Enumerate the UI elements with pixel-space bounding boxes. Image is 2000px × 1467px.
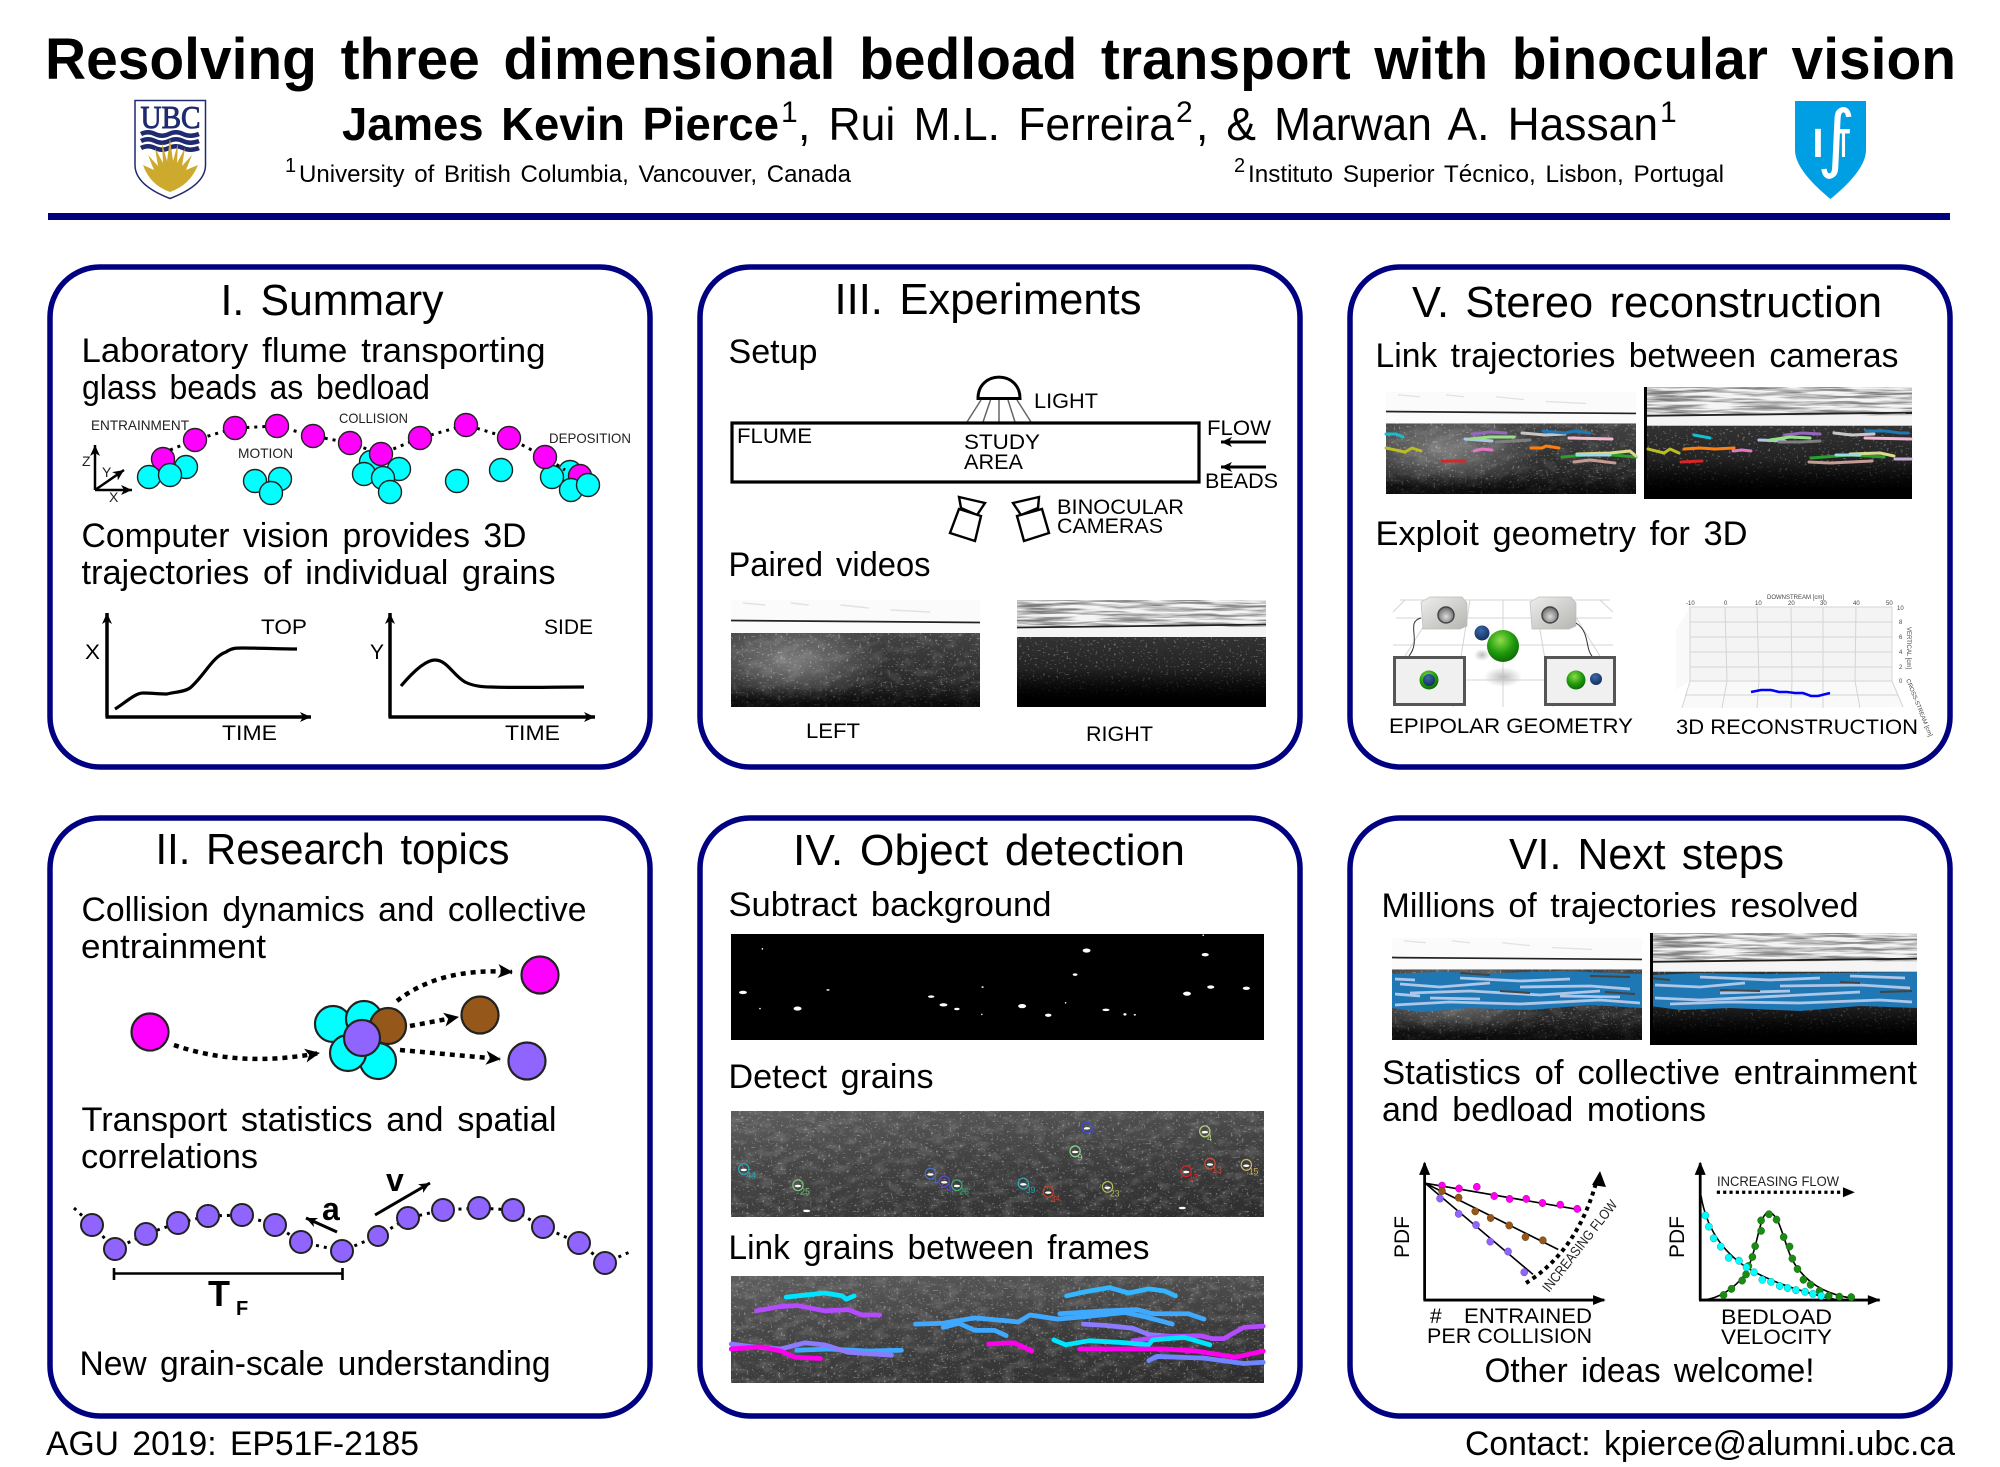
photo: left with all trajectories: [1357, 938, 1642, 1040]
heading: IV. Object detection: [793, 826, 1185, 875]
text: other ideas: Other ideas welcome!: [1484, 1352, 1814, 1390]
icon: UBC crest: [135, 99, 206, 198]
panel: III. Experiments: RIGHT: [1086, 723, 1153, 746]
diagram: flume setup: BEADS: [1205, 470, 1278, 493]
arrows: [174, 971, 512, 1059]
title: Resolving three dimensional bedload transport with binocular vision: [45, 27, 1956, 92]
icon: UBC crest: UBC: [140, 99, 200, 135]
photo: detected grains: 13: [1212, 1165, 1222, 1175]
text: statistics: and bedload motions: [1382, 1091, 1706, 1129]
text: collision dynamics: Collision dynamics and collective: [82, 891, 586, 929]
text: statistics: [1382, 1054, 1918, 1129]
plot: 3D reconstruction: 30: [1820, 601, 1827, 607]
photo: detected grains: 39: [1026, 1185, 1035, 1195]
diagram: trajectory: T: [208, 1273, 230, 1314]
plot: 3D reconstruction: 10: [1897, 606, 1904, 612]
header rule: [48, 213, 1950, 220]
photo: left with trajectories: [1351, 392, 1636, 494]
photo: detected grains: 3: [947, 1183, 951, 1193]
chart: bedload velocity: BEDLOAD: [1721, 1306, 1832, 1329]
text block: flume: [82, 332, 546, 407]
header: [45, 27, 1956, 220]
icon: left camera: [950, 497, 985, 541]
text block: computer vision: [82, 517, 556, 592]
diagram: trajectory: F: [236, 1298, 248, 1320]
diagram: bead trajectory: [82, 410, 631, 505]
photo: detected grains: 4: [1207, 1133, 1212, 1143]
plot: 3D reconstruction: 4: [1899, 650, 1903, 656]
heading: III. Experiments: [834, 275, 1142, 324]
bracket: flight time: [114, 1268, 342, 1280]
text: exploit geometry: Exploit geometry for 3D: [1376, 515, 1748, 553]
authors: [342, 96, 1677, 150]
text: transport statistics: correlations: [81, 1138, 258, 1176]
plot: 3D reconstruction: 40: [1853, 601, 1860, 607]
subheading: setup: Setup: [728, 333, 818, 371]
text: collision dynamics: [81, 891, 586, 966]
plot: 3D reconstruction: [1676, 595, 1933, 738]
photo: detected grains: 7: [1089, 1129, 1094, 1139]
footer: contact: Contact: kpierce@alumni.ubc.ca: [1465, 1425, 1955, 1463]
arrow: beads: [1221, 466, 1266, 468]
outgoing grains: [462, 956, 558, 1080]
text: link trajectories: Link trajectories between cameras: [1376, 337, 1898, 375]
chart: bedload velocity: PDF: [1666, 1216, 1689, 1258]
photo: detected grains: 26: [959, 1187, 969, 1197]
diagram: flume setup: [732, 377, 1278, 541]
plot: 3D reconstruction: 20: [1788, 601, 1795, 607]
arrow: increasing flow: [1526, 1171, 1606, 1283]
panel: IV. Object detection: [700, 818, 1300, 1416]
text: statistics: Statistics of collective entrainment: [1382, 1054, 1918, 1092]
diagram: flume setup: FLUME: [737, 425, 812, 448]
diagram: bead trajectory: MOTION: [238, 445, 293, 461]
plot: 3D reconstruction: 2: [1899, 665, 1903, 671]
text: new understanding: New grain-scale understanding: [80, 1345, 550, 1383]
bed cluster: [315, 1001, 406, 1079]
panel: V. Stereo reconstruction: [1350, 267, 1950, 767]
photo: detected grains: 23: [1110, 1188, 1120, 1198]
chart: entrained per collision: INCREASING FLOW: [1539, 1196, 1621, 1295]
chart: top view: X: [85, 641, 100, 664]
photo: detected grains: [731, 1111, 1264, 1217]
plot: 3D reconstruction: -10: [1686, 601, 1695, 607]
arrow: acceleration: [306, 1218, 337, 1232]
arrow: velocity: [375, 1183, 430, 1215]
affiliation 2: Instituto Superior Técnico, Lisbon, Portugal: [1248, 161, 1724, 188]
panel: V. Stereo reconstruction: 3D RECONSTRUCTION: [1676, 716, 1918, 739]
authors: 1: [1660, 96, 1677, 129]
icon: right camera: [1013, 497, 1049, 541]
labels: EPIPOLAR GEOMETRY: [1389, 715, 1633, 738]
incoming grain: [132, 1014, 168, 1050]
affiliation 2: 2: [1234, 155, 1245, 177]
photo: background subtraction: [731, 934, 1264, 1040]
plot: 3D reconstruction: VERTICAL [cm]: [1905, 627, 1911, 669]
chart: entrained per collision: [1391, 1162, 1621, 1348]
photo: linked trajectories: [731, 1276, 1264, 1383]
authors: 2: [1176, 96, 1193, 129]
heading: VI. Next steps: [1509, 830, 1784, 879]
plot: 3D reconstruction: 0: [1724, 601, 1728, 607]
affiliation 1: University of British Columbia, Vancouver, Canada: [299, 161, 852, 188]
diagram: trajectory: v: [386, 1162, 404, 1198]
plot: 3D reconstruction: CROSS-STREAM [cm]: [1904, 679, 1933, 738]
chart: entrained per collision: PDF: [1391, 1216, 1414, 1258]
photo: detected grains: 9: [1077, 1153, 1082, 1163]
diagram: flume setup: LIGHT: [1034, 390, 1098, 413]
chart: entrained per collision: PER COLLISION: [1427, 1325, 1592, 1348]
chart: top view: TIME: [222, 722, 277, 745]
icon: IST crest: [1795, 95, 1866, 199]
chart: side view: Y: [370, 641, 384, 664]
icon: camera left: [1421, 597, 1467, 629]
diagram: trajectory: a: [322, 1191, 340, 1227]
subheading: paired videos: Paired videos: [728, 546, 930, 584]
authors: , Rui M.L. Ferreira: [798, 98, 1174, 150]
chart: top view: [85, 613, 311, 745]
photo: detected grains: 44: [746, 1170, 756, 1181]
photo: right camera: [1017, 600, 1266, 707]
axes triad: [82, 445, 132, 505]
chart: side view: SIDE: [544, 616, 593, 639]
footer: abstract number: AGU 2019: EP51F-2185: [46, 1425, 419, 1463]
chart: top view: TOP: [261, 616, 307, 639]
icon: light: [967, 377, 1031, 422]
panel: I. Summary: [50, 267, 650, 767]
panel: III. Experiments: LEFT: [806, 720, 860, 743]
axes triad: Z: [82, 453, 91, 469]
authors: 1: [781, 96, 798, 129]
diagram: trajectory: [74, 1162, 632, 1320]
text: collision dynamics: entrainment: [81, 928, 267, 966]
diagram: flume setup: STUDY: [964, 431, 1040, 454]
axes triad: Y: [102, 464, 112, 480]
diagram: flume setup: CAMERAS: [1057, 515, 1163, 538]
left view frame: [1394, 658, 1464, 704]
plot: 3D reconstruction: 10: [1755, 601, 1762, 607]
plot: 3D reconstruction: 50: [1886, 601, 1893, 607]
plot: 3D reconstruction: DOWNSTREAM [cm]: [1767, 595, 1824, 601]
diagram: bead trajectory: COLLISION: [339, 410, 408, 426]
diagram: epipolar geometry: [1393, 597, 1614, 707]
icon: IST crest: I: [1812, 120, 1824, 166]
heading: V. Stereo reconstruction: [1412, 278, 1882, 327]
plot: 3D reconstruction: 6: [1899, 635, 1903, 641]
chart: bedload velocity: VELOCITY: [1721, 1326, 1832, 1349]
flume rectangle: [732, 423, 1199, 482]
panel: III. Experiments: [696, 267, 1300, 767]
subheading: link grains: Link grains between frames: [728, 1229, 1150, 1267]
photo: right with trajectories: [1644, 387, 1912, 499]
chart: entrained per collision: #: [1430, 1305, 1442, 1328]
panel: II. Research topics: [50, 818, 650, 1416]
text block: computer vision: Computer vision provides 3D: [82, 517, 526, 555]
icon: camera right: [1530, 597, 1576, 629]
text block: flume: Laboratory flume transporting: [82, 332, 546, 370]
chart: bedload velocity: [1666, 1162, 1881, 1349]
icon: IST crest: T: [1837, 120, 1850, 166]
authors: James Kevin Pierce: [342, 98, 779, 150]
photo: detected grains: 15: [1249, 1166, 1258, 1176]
chart: side view: [370, 613, 595, 745]
text: transport statistics: [81, 1101, 556, 1176]
photo: right with all trajectories: [1650, 933, 1917, 1045]
text block: computer vision: trajectories of individual grains: [82, 554, 556, 592]
panel: VI. Next steps: [1350, 818, 1950, 1416]
chart: side view: TIME: [505, 722, 560, 745]
text block: flume: glass beads as bedload: [82, 369, 430, 407]
bed grains and moving grain: [138, 414, 600, 504]
diagram: bead trajectory: DEPOSITION: [549, 430, 631, 446]
chart: bedload velocity: INCREASING FLOW: [1717, 1173, 1840, 1189]
authors: , & Marwan A. Hassan: [1196, 98, 1658, 150]
photo: detected grains: 34: [1051, 1193, 1060, 1203]
text: millions: Millions of trajectories resolved: [1382, 887, 1858, 925]
right view frame: [1546, 658, 1614, 704]
diagram: flume setup: FLOW: [1207, 417, 1271, 440]
photo: detected grains: 17: [1189, 1172, 1198, 1183]
affiliation 1: 1: [285, 155, 296, 177]
subheading: subtract background: Subtract background: [728, 886, 1052, 924]
subheading: detect grains: Detect grains: [728, 1058, 934, 1096]
plot: 3D reconstruction: 8: [1899, 620, 1903, 626]
plot: 3D reconstruction: 0: [1899, 679, 1903, 685]
diagram: collision: [132, 956, 558, 1080]
labels: ENTRAINMENT: [91, 417, 189, 433]
text: transport statistics: Transport statistics and spatial: [82, 1101, 556, 1139]
diagram: flume setup: BINOCULAR: [1057, 496, 1184, 519]
axes triad: X: [109, 489, 119, 505]
photo: detected grains: 1: [933, 1175, 938, 1185]
heading: II. Research topics: [156, 825, 510, 874]
arrow: flow: [1221, 440, 1266, 444]
heading: I. Summary: [220, 276, 444, 325]
icon: IST crest: ∫: [1817, 95, 1856, 181]
diagram: flume setup: AREA: [964, 451, 1023, 474]
chart: entrained per collision: ENTRAINED: [1464, 1305, 1592, 1328]
photo: detected grains: 25: [800, 1187, 810, 1197]
photo: left camera: [696, 600, 980, 707]
